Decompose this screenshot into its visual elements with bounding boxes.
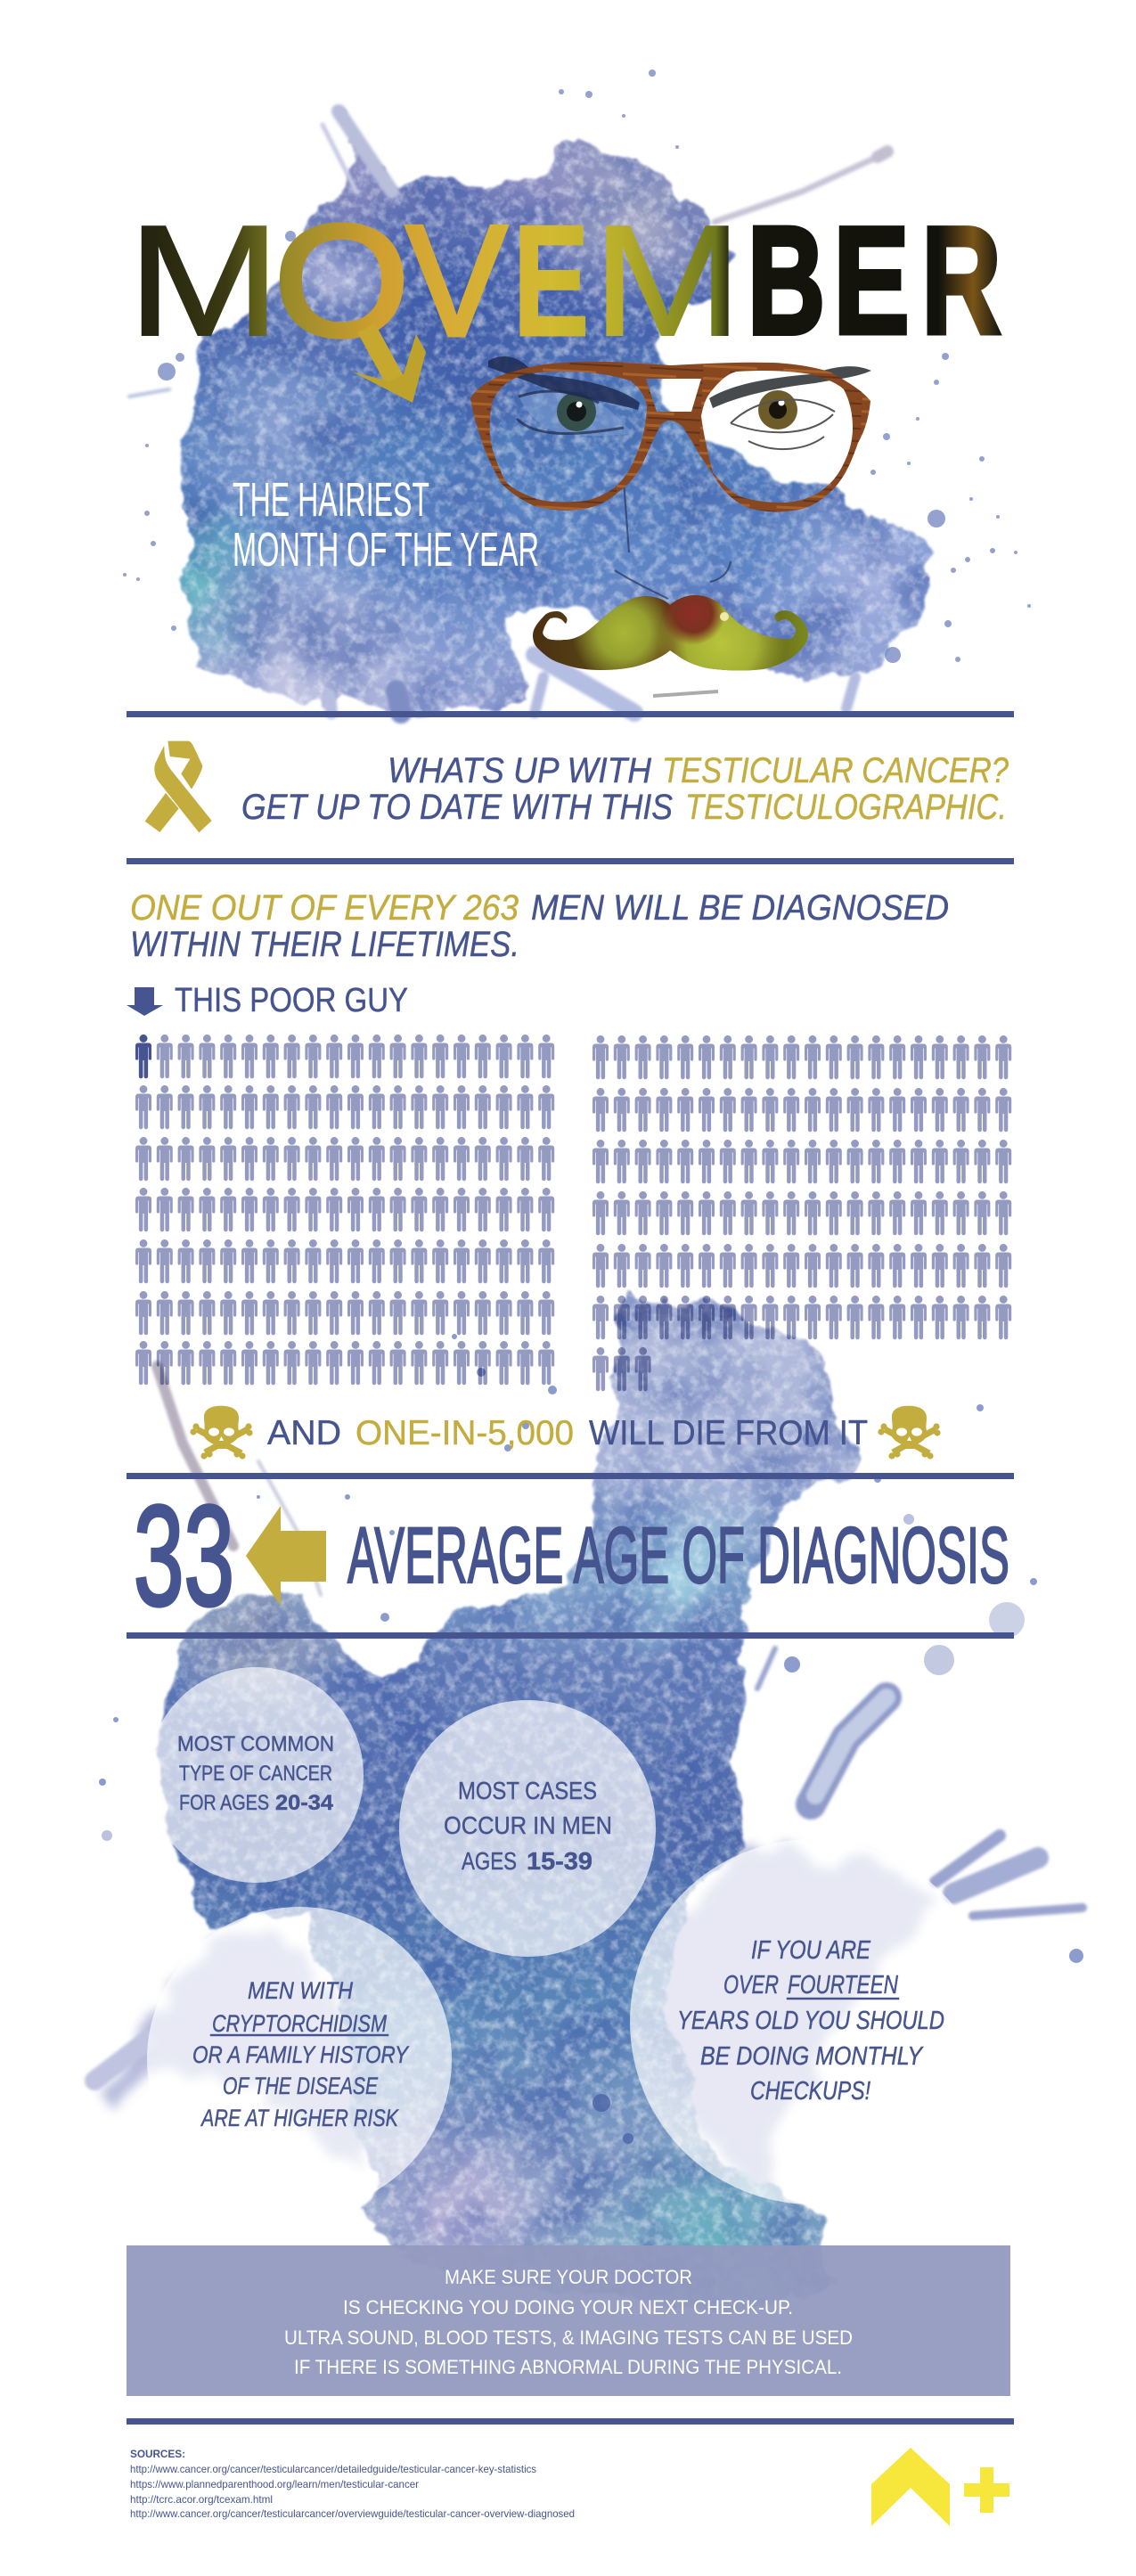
pictogram: left block of men xyxy=(135,1034,554,1385)
heading: what's up with testicular cancer: WHATS UP WITH xyxy=(388,751,651,790)
sources xyxy=(130,2448,575,2520)
mouth line xyxy=(653,691,718,696)
sources: https://www.plannedparenthood.org/learn/men/testicular-cancer xyxy=(130,2478,419,2490)
circle: most common cancer: 20-34 xyxy=(275,1791,334,1815)
rule lines xyxy=(127,711,1014,2425)
circle: monthly checkups: OVER xyxy=(723,1971,779,1999)
sources: http://www.cancer.org/cancer/testicularcancer/overviewguide/testicular-cancer-overview-diagnosed xyxy=(130,2507,575,2520)
icon: gold awareness ribbon xyxy=(145,741,212,832)
circle: most common cancer: MOST COMMON xyxy=(177,1732,334,1756)
callout: doctor check-up box: IS CHECKING YOU DOING YOUR NEXT CHECK-UP. xyxy=(343,2296,793,2318)
splatter dots xyxy=(123,70,1031,663)
label: this poor guy: THIS POOR GUY xyxy=(175,982,408,1019)
pictogram: highlighted man xyxy=(135,1034,151,1078)
circle: risk factors: OF THE DISEASE xyxy=(223,2073,379,2099)
callout: doctor check-up box: MAKE SURE YOUR DOCTOR xyxy=(445,2266,692,2288)
circle: most cases: AGES xyxy=(462,1847,517,1875)
face illustration with glasses xyxy=(470,356,871,696)
streaks and drops xyxy=(94,1366,1083,2081)
mars arrow on the letter O xyxy=(352,328,426,403)
sources: SOURCES: xyxy=(130,2448,185,2460)
mustache xyxy=(533,595,808,670)
glasses xyxy=(470,362,870,511)
subtitle xyxy=(233,473,539,577)
sources: http://www.cancer.org/cancer/testicularcancer/detailedguide/testicular-cancer-key-statistics xyxy=(130,2463,536,2475)
circle: risk factors: OR A FAMILY HISTORY xyxy=(192,2041,410,2068)
circle: risk factors xyxy=(147,1907,452,2212)
circle: risk factors: MEN WITH xyxy=(248,1977,353,2004)
circle: most cases xyxy=(399,1700,656,1957)
heading: what's up with testicular cancer: TESTICULOGRAPHIC. xyxy=(685,788,1007,827)
icon: down arrow xyxy=(127,987,163,1016)
logo: yellow arrow plus xyxy=(871,2448,1009,2526)
callout: doctor check-up box xyxy=(127,2245,1010,2396)
pale left arm xyxy=(96,1934,374,2174)
heading: what's up with testicular cancer xyxy=(241,751,1009,827)
heading: what's up with testicular cancer: GET UP TO DATE WITH THIS xyxy=(241,788,673,827)
circle: most common cancer xyxy=(148,1667,364,1883)
pale splash under big circle xyxy=(624,1853,944,2201)
lower watercolor splash xyxy=(94,1289,1083,2308)
right eyebrow xyxy=(709,366,871,408)
circle: most cases: OCCUR IN MEN xyxy=(444,1811,612,1839)
subtitle: MONTH OF THE YEAR xyxy=(233,523,539,577)
statement: one in 5,000: AND xyxy=(267,1414,341,1452)
pictogram: right block of men xyxy=(593,1035,1011,1391)
title: MOVEMBER: E xyxy=(833,195,910,366)
title: MOVEMBER: B xyxy=(748,195,825,366)
callout: doctor check-up box: IF THERE IS SOMETHING ABNORMAL DURING THE PHYSICAL. xyxy=(294,2356,842,2378)
statement: one in 5,000 xyxy=(267,1414,868,1452)
nose lines xyxy=(615,481,731,599)
circle: risk factors: ARE AT HIGHER RISK xyxy=(200,2105,399,2131)
circle: most cases: MOST CASES xyxy=(458,1777,597,1804)
subtitle: THE HAIRIEST xyxy=(233,473,429,527)
streaks xyxy=(129,111,887,713)
statement: one in 5,000: WILL DIE FROM IT xyxy=(589,1414,868,1452)
title: MOVEMBER: V xyxy=(406,192,507,369)
title: MOVEMBER: M xyxy=(127,192,281,369)
circle: monthly checkups: CHECKUPS! xyxy=(750,2077,870,2106)
sources: http://tcrc.acor.org/tcexam.html xyxy=(130,2493,273,2506)
title: MOVEMBER: M xyxy=(593,192,742,369)
icon: left skull and crossbones xyxy=(190,1406,253,1460)
callout: doctor check-up box: ULTRA SOUND, BLOOD TESTS, & IMAGING TESTS CAN BE USED xyxy=(284,2327,853,2349)
icon: gold arrow xyxy=(246,1506,326,1606)
circle: risk factors: CRYPTORCHIDISM xyxy=(212,2010,387,2037)
circle: most cases: 15-39 xyxy=(527,1847,593,1875)
title: MOVEMBER: O xyxy=(274,192,409,369)
circle: monthly checkups: IF YOU ARE xyxy=(751,1936,871,1965)
icon: right skull and crossbones xyxy=(878,1406,941,1460)
statistic: one out of every 263: ONE OUT OF EVERY 263 xyxy=(130,888,519,928)
statistic: one out of every 263: WITHIN THEIR LIFETIMES. xyxy=(130,925,519,964)
title: MOVEMBER: R xyxy=(921,195,1001,366)
left eyebrow xyxy=(488,356,640,410)
title: MOVEMBER: E xyxy=(513,192,589,369)
statistic: one out of every 263 xyxy=(130,888,949,964)
big number 33: 33 xyxy=(134,1476,234,1635)
circle: monthly checkups xyxy=(630,1839,995,2204)
circle: monthly checkups: BE DOING MONTHLY xyxy=(700,2042,924,2071)
left eye xyxy=(517,391,634,436)
heading: what's up with testicular cancer: TESTICULAR CANCER? xyxy=(662,751,1009,790)
circle: monthly checkups: FOURTEEN xyxy=(788,1971,898,1999)
statement: one in 5,000: ONE-IN-5,000 xyxy=(356,1414,574,1452)
circle: most common cancer: TYPE OF CANCER xyxy=(179,1762,332,1786)
right eye xyxy=(731,390,835,449)
main body xyxy=(154,1289,854,2308)
circle: most common cancer: FOR AGES xyxy=(179,1791,269,1815)
top watercolor splash xyxy=(123,70,1031,713)
statistic: one out of every 263: MEN WILL BE DIAGNOSED xyxy=(531,888,949,928)
title: MOVEMBER xyxy=(127,192,1001,369)
circle: monthly checkups: YEARS OLD YOU SHOULD xyxy=(677,2007,944,2035)
